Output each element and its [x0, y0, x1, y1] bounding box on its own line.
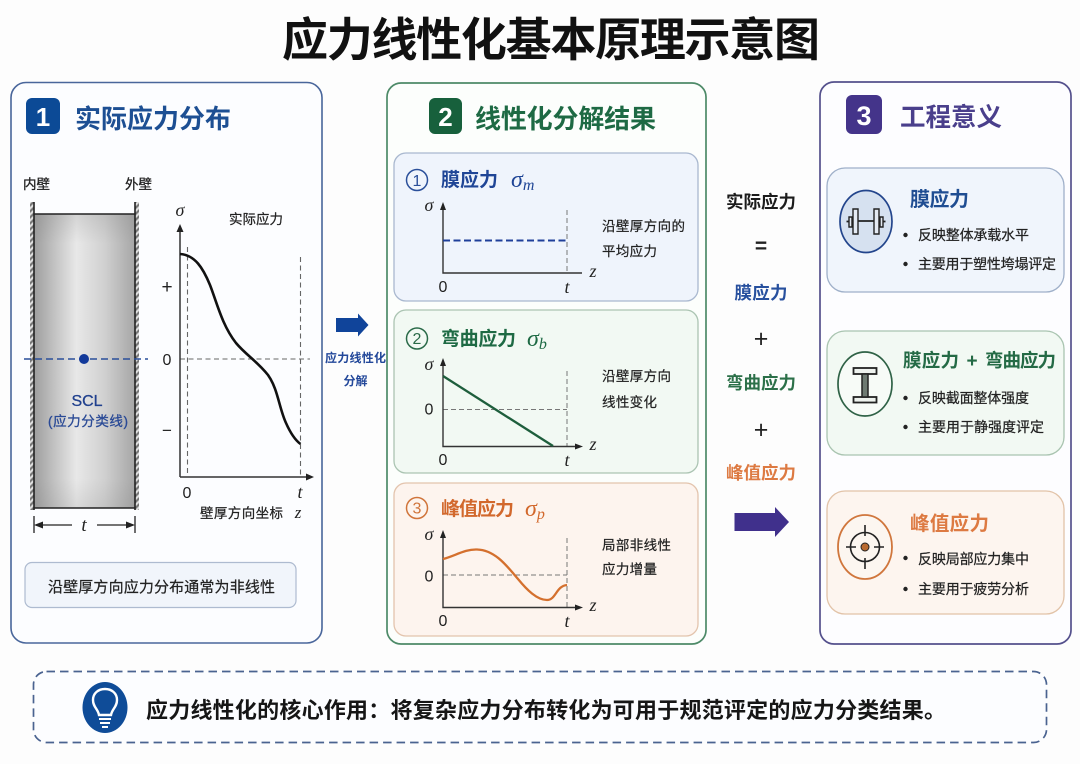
- arrow: linearization: [336, 314, 368, 336]
- badge: 1: [26, 98, 60, 134]
- callout: core role: [34, 672, 1046, 742]
- SCL label: SCL: [71, 393, 103, 410]
- equation: stress superposition: +: [754, 325, 768, 353]
- bullet list: 反映局部应力集中: [918, 551, 1029, 567]
- card heading: p: [536, 506, 545, 523]
- equation: stress superposition: [726, 192, 796, 483]
- badge: 3: 3: [856, 101, 872, 131]
- chart: actual stress curve: 壁厚方向坐标: [200, 506, 283, 521]
- chart: peak: t: [564, 611, 570, 631]
- equation: stress superposition: 膜应力: [734, 283, 788, 303]
- SCL label: (应力分类线): [48, 413, 128, 429]
- card heading: 膜应力: [441, 168, 498, 191]
- chart: actual stress curve: [161, 200, 314, 522]
- equation: stress superposition: 弯曲应力: [726, 373, 796, 393]
- equation: stress superposition: =: [755, 235, 767, 258]
- chart: membrane: z: [588, 261, 597, 281]
- card heading: b: [539, 336, 547, 353]
- card heading: 弯曲应力: [441, 327, 516, 350]
- card heading: σ: [527, 326, 539, 352]
- chart: membrane: 0: [439, 279, 448, 296]
- badge: 2: [429, 98, 462, 134]
- chart: bending: t: [564, 450, 570, 470]
- label: linearization decomposition: [325, 350, 386, 388]
- card: bending stress: [394, 310, 698, 473]
- chart: peak: [425, 524, 597, 631]
- chart: peak: z: [588, 595, 597, 615]
- chart: actual stress curve: z: [294, 503, 302, 522]
- equation: stress superposition: +: [754, 416, 768, 444]
- chart: membrane: t: [564, 277, 570, 297]
- number marker: [406, 498, 428, 518]
- bullet list: [903, 227, 1056, 272]
- icon: dumbbell: [840, 190, 892, 252]
- icon: target: [838, 515, 892, 579]
- description: [602, 219, 685, 259]
- chart: actual stress curve: 0: [183, 485, 192, 502]
- chart: actual stress curve: 实际应力: [229, 211, 283, 227]
- label: linearization decomposition: 应力线性化: [325, 350, 386, 365]
- chart: bending: z: [588, 434, 597, 454]
- thickness dimension t: [34, 515, 135, 536]
- bullet list: [903, 551, 1029, 597]
- wall section diagram: [30, 202, 139, 510]
- note box: [25, 562, 296, 608]
- note box: 沿壁厚方向应力分布通常为非线性: [48, 578, 275, 596]
- card heading: 弯曲应力: [985, 350, 1056, 371]
- chart: bending: 0: [439, 452, 448, 469]
- number marker: 2: [413, 331, 422, 348]
- panel heading: 线性化分解结果: [475, 104, 656, 134]
- label: linearization decomposition: 分解: [343, 373, 368, 388]
- chart: bending: σ: [425, 354, 435, 374]
- icon: light bulb: [82, 682, 128, 733]
- badge: 2: 2: [438, 102, 453, 132]
- card heading: σ: [525, 496, 537, 522]
- bullet list: 主要用于塑性垮塌评定: [918, 256, 1056, 272]
- description: 沿壁厚方向的: [602, 219, 685, 234]
- chart: actual stress curve: t: [297, 482, 303, 502]
- card: membrane meaning: [827, 168, 1064, 292]
- card: peak stress: [394, 483, 698, 636]
- description: 沿壁厚方向: [602, 369, 671, 384]
- card heading: [441, 326, 547, 353]
- chart: peak: σ: [425, 524, 435, 544]
- card heading: [903, 350, 1056, 372]
- bullet list: 主要用于疲劳分析: [918, 581, 1029, 597]
- arrow: to engineering meaning: [734, 507, 789, 537]
- chart: peak: 0: [425, 568, 434, 586]
- chart: bending: [425, 354, 597, 470]
- bullet list: 反映截面整体强度: [918, 390, 1029, 406]
- card heading: 膜应力: [903, 350, 959, 371]
- callout text: 应力线性化的核心作用：将复杂应力分布转化为可用于规范评定的应力分类结果。: [146, 698, 946, 723]
- label: inner wall: 内壁: [23, 177, 50, 192]
- thickness dimension t: t: [81, 515, 87, 536]
- badge: 3: [846, 95, 882, 134]
- card heading: 峰值应力: [910, 512, 989, 535]
- number marker: 1: [413, 173, 422, 190]
- badge: 1: 1: [36, 102, 50, 132]
- card heading: +: [966, 351, 978, 372]
- card heading: 膜应力: [910, 187, 969, 211]
- card heading: m: [523, 177, 534, 194]
- bullet list: [903, 390, 1044, 435]
- card heading: 峰值应力: [441, 497, 514, 520]
- SCL label: [48, 393, 128, 429]
- chart: actual stress curve: −: [162, 421, 172, 440]
- panel heading: 实际应力分布: [75, 104, 231, 134]
- chart: bending: 0: [425, 402, 434, 418]
- panel: linearization results: [387, 83, 706, 644]
- number marker: [406, 170, 428, 190]
- description: 局部非线性: [602, 538, 671, 553]
- bullet list: 主要用于静强度评定: [918, 419, 1044, 435]
- panel heading: 工程意义: [900, 103, 1002, 132]
- label: outer wall: 外壁: [125, 177, 152, 192]
- card: membrane stress: [394, 153, 698, 301]
- description: [602, 538, 671, 577]
- chart: actual stress curve: σ: [176, 200, 186, 220]
- card heading: σ: [511, 167, 523, 193]
- equation: stress superposition: 峰值应力: [726, 463, 796, 483]
- card: peak meaning: [827, 491, 1064, 614]
- chart: membrane: σ: [425, 195, 435, 215]
- panel: actual stress distribution: [11, 82, 322, 643]
- description: [602, 369, 671, 410]
- number marker: [406, 328, 428, 349]
- title: 应力线性化基本原理示意图: [282, 14, 820, 66]
- icon: I-beam: [838, 352, 892, 416]
- description: 应力增量: [602, 561, 657, 577]
- number marker: 3: [413, 500, 422, 518]
- card heading: [441, 496, 545, 523]
- equation: stress superposition: 实际应力: [726, 192, 796, 212]
- chart: actual stress curve: 0: [163, 352, 172, 369]
- description: 线性变化: [602, 395, 657, 410]
- panel: engineering meaning: [820, 82, 1071, 644]
- card heading: [441, 167, 534, 194]
- chart: actual stress curve: +: [161, 277, 173, 298]
- chart: membrane: [425, 195, 597, 297]
- bullet list: 反映整体承载水平: [918, 227, 1029, 243]
- description: 平均应力: [602, 243, 657, 259]
- chart: peak: 0: [439, 613, 448, 630]
- card: membrane plus bending meaning: [827, 331, 1064, 455]
- SCL line and midpoint: [24, 354, 148, 364]
